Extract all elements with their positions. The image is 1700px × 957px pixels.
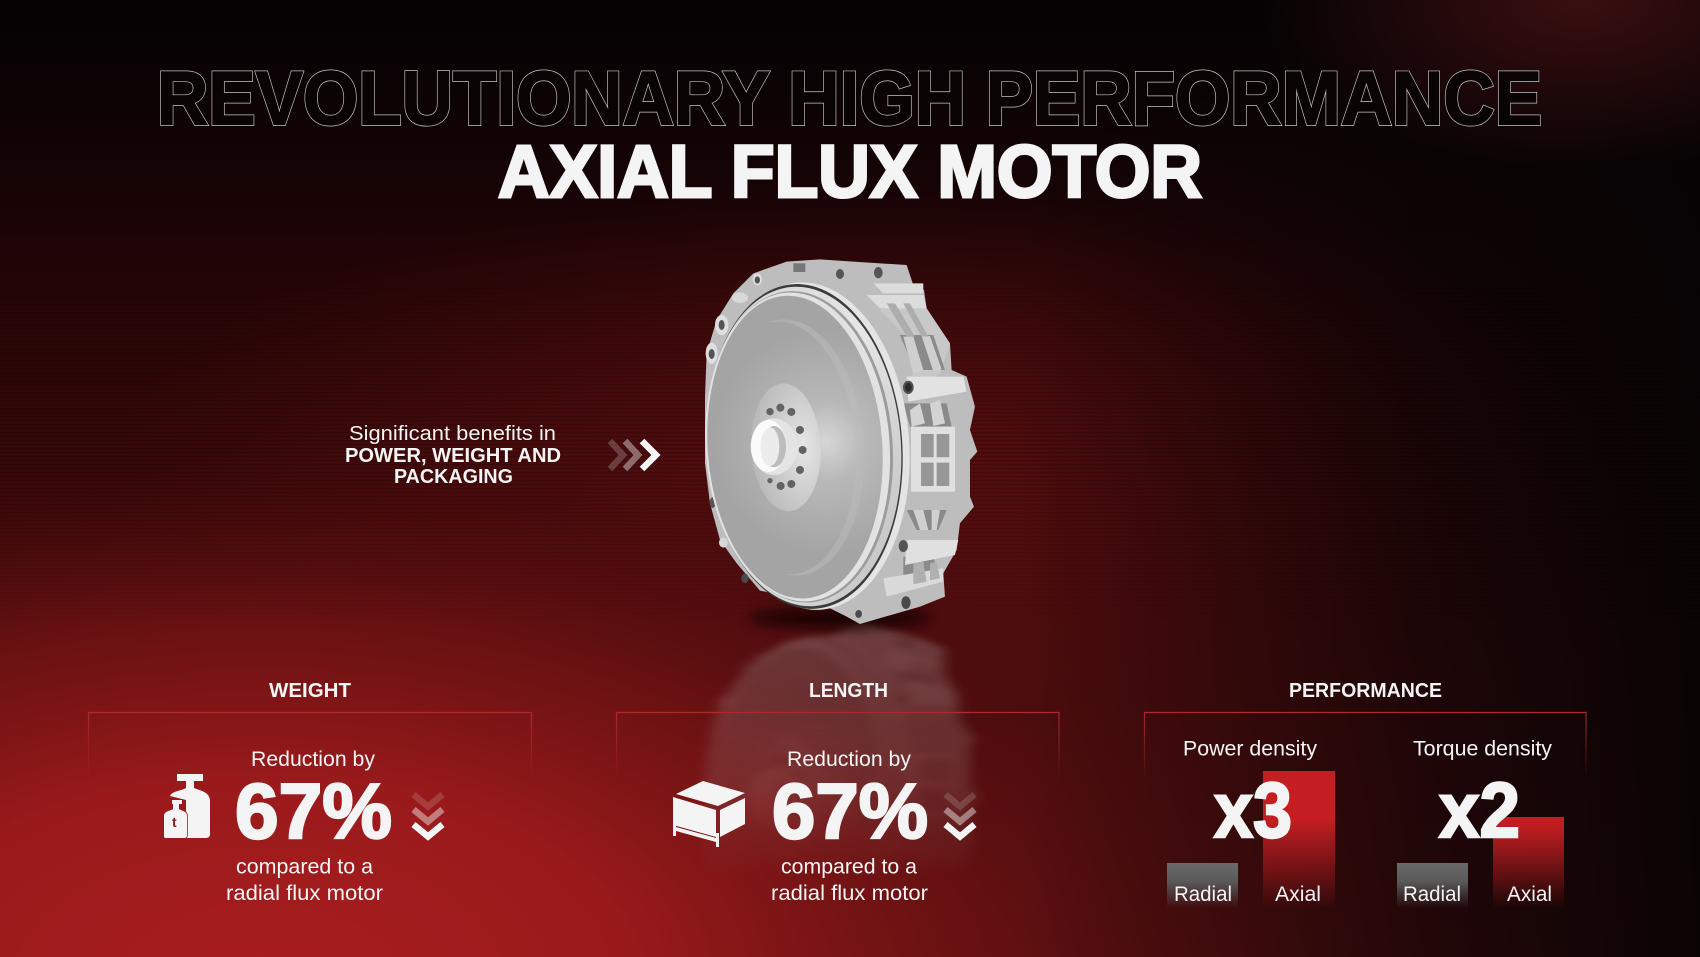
benefits callout: PACKAGING [394, 465, 513, 488]
benefits callout [345, 422, 561, 488]
text: reduction by: Reduction by [251, 748, 376, 771]
panel frame [88, 712, 532, 778]
label: axial: Axial [1275, 883, 1321, 906]
value: x2: x2 [1439, 766, 1520, 854]
panel: length [616, 680, 1059, 905]
heading: performance: PERFORMANCE [1289, 680, 1442, 702]
text: comparison [226, 856, 383, 905]
bar: radial [1167, 863, 1238, 908]
title line 2: solid: AXIAL FLUX MOTOR [498, 130, 1202, 213]
arrow: triple chevron down [946, 794, 974, 836]
motor shadow [750, 609, 930, 627]
heading: weight: WEIGHT [269, 680, 351, 702]
icon: weights [164, 774, 210, 838]
bar: axial [1493, 817, 1564, 908]
bar: radial [1397, 863, 1468, 908]
arrow: triple chevron down [414, 794, 442, 836]
benefits callout: Significant benefits in [349, 422, 556, 445]
motor reflection [702, 623, 978, 854]
bar: axial [1263, 771, 1335, 908]
benefits callout: POWER, WEIGHT AND [345, 444, 561, 467]
panel frame [1144, 712, 1586, 778]
text: comparison: radial flux motor [771, 882, 928, 905]
label: torque density: Torque density [1413, 738, 1552, 760]
text: reduction by: Reduction by [787, 748, 912, 771]
panel: performance [1144, 680, 1586, 908]
title [157, 56, 1542, 213]
icon label: t: t [172, 814, 177, 830]
title line 1: outlined: REVOLUTIONARY HIGH PERFORMANCE [157, 56, 1542, 142]
title line 1: outlined: REVOLUTIONARY HIGH PERFORMANCE [157, 56, 1542, 142]
text: comparison: radial flux motor [226, 882, 383, 905]
motor render [694, 259, 977, 624]
text: comparison [771, 856, 928, 905]
label: axial: Axial [1507, 883, 1552, 906]
text: comparison: compared to a [781, 856, 917, 878]
value: 67%: 67% [235, 767, 392, 855]
chart: power density [1167, 738, 1335, 908]
label: radial: Radial [1403, 883, 1461, 906]
panel frame [616, 712, 1059, 778]
chart: torque density [1397, 738, 1564, 908]
label: radial: Radial [1174, 883, 1232, 906]
icon: box with dimension bar [673, 781, 745, 847]
value: 67%: 67% [772, 767, 928, 855]
heading: length: LENGTH [809, 680, 888, 702]
text: comparison: compared to a [236, 856, 373, 878]
panel: weight [88, 680, 532, 905]
value: x3: x3 [1214, 766, 1292, 854]
label: power density: Power density [1183, 738, 1317, 760]
arrow: triple chevron right [610, 441, 656, 469]
